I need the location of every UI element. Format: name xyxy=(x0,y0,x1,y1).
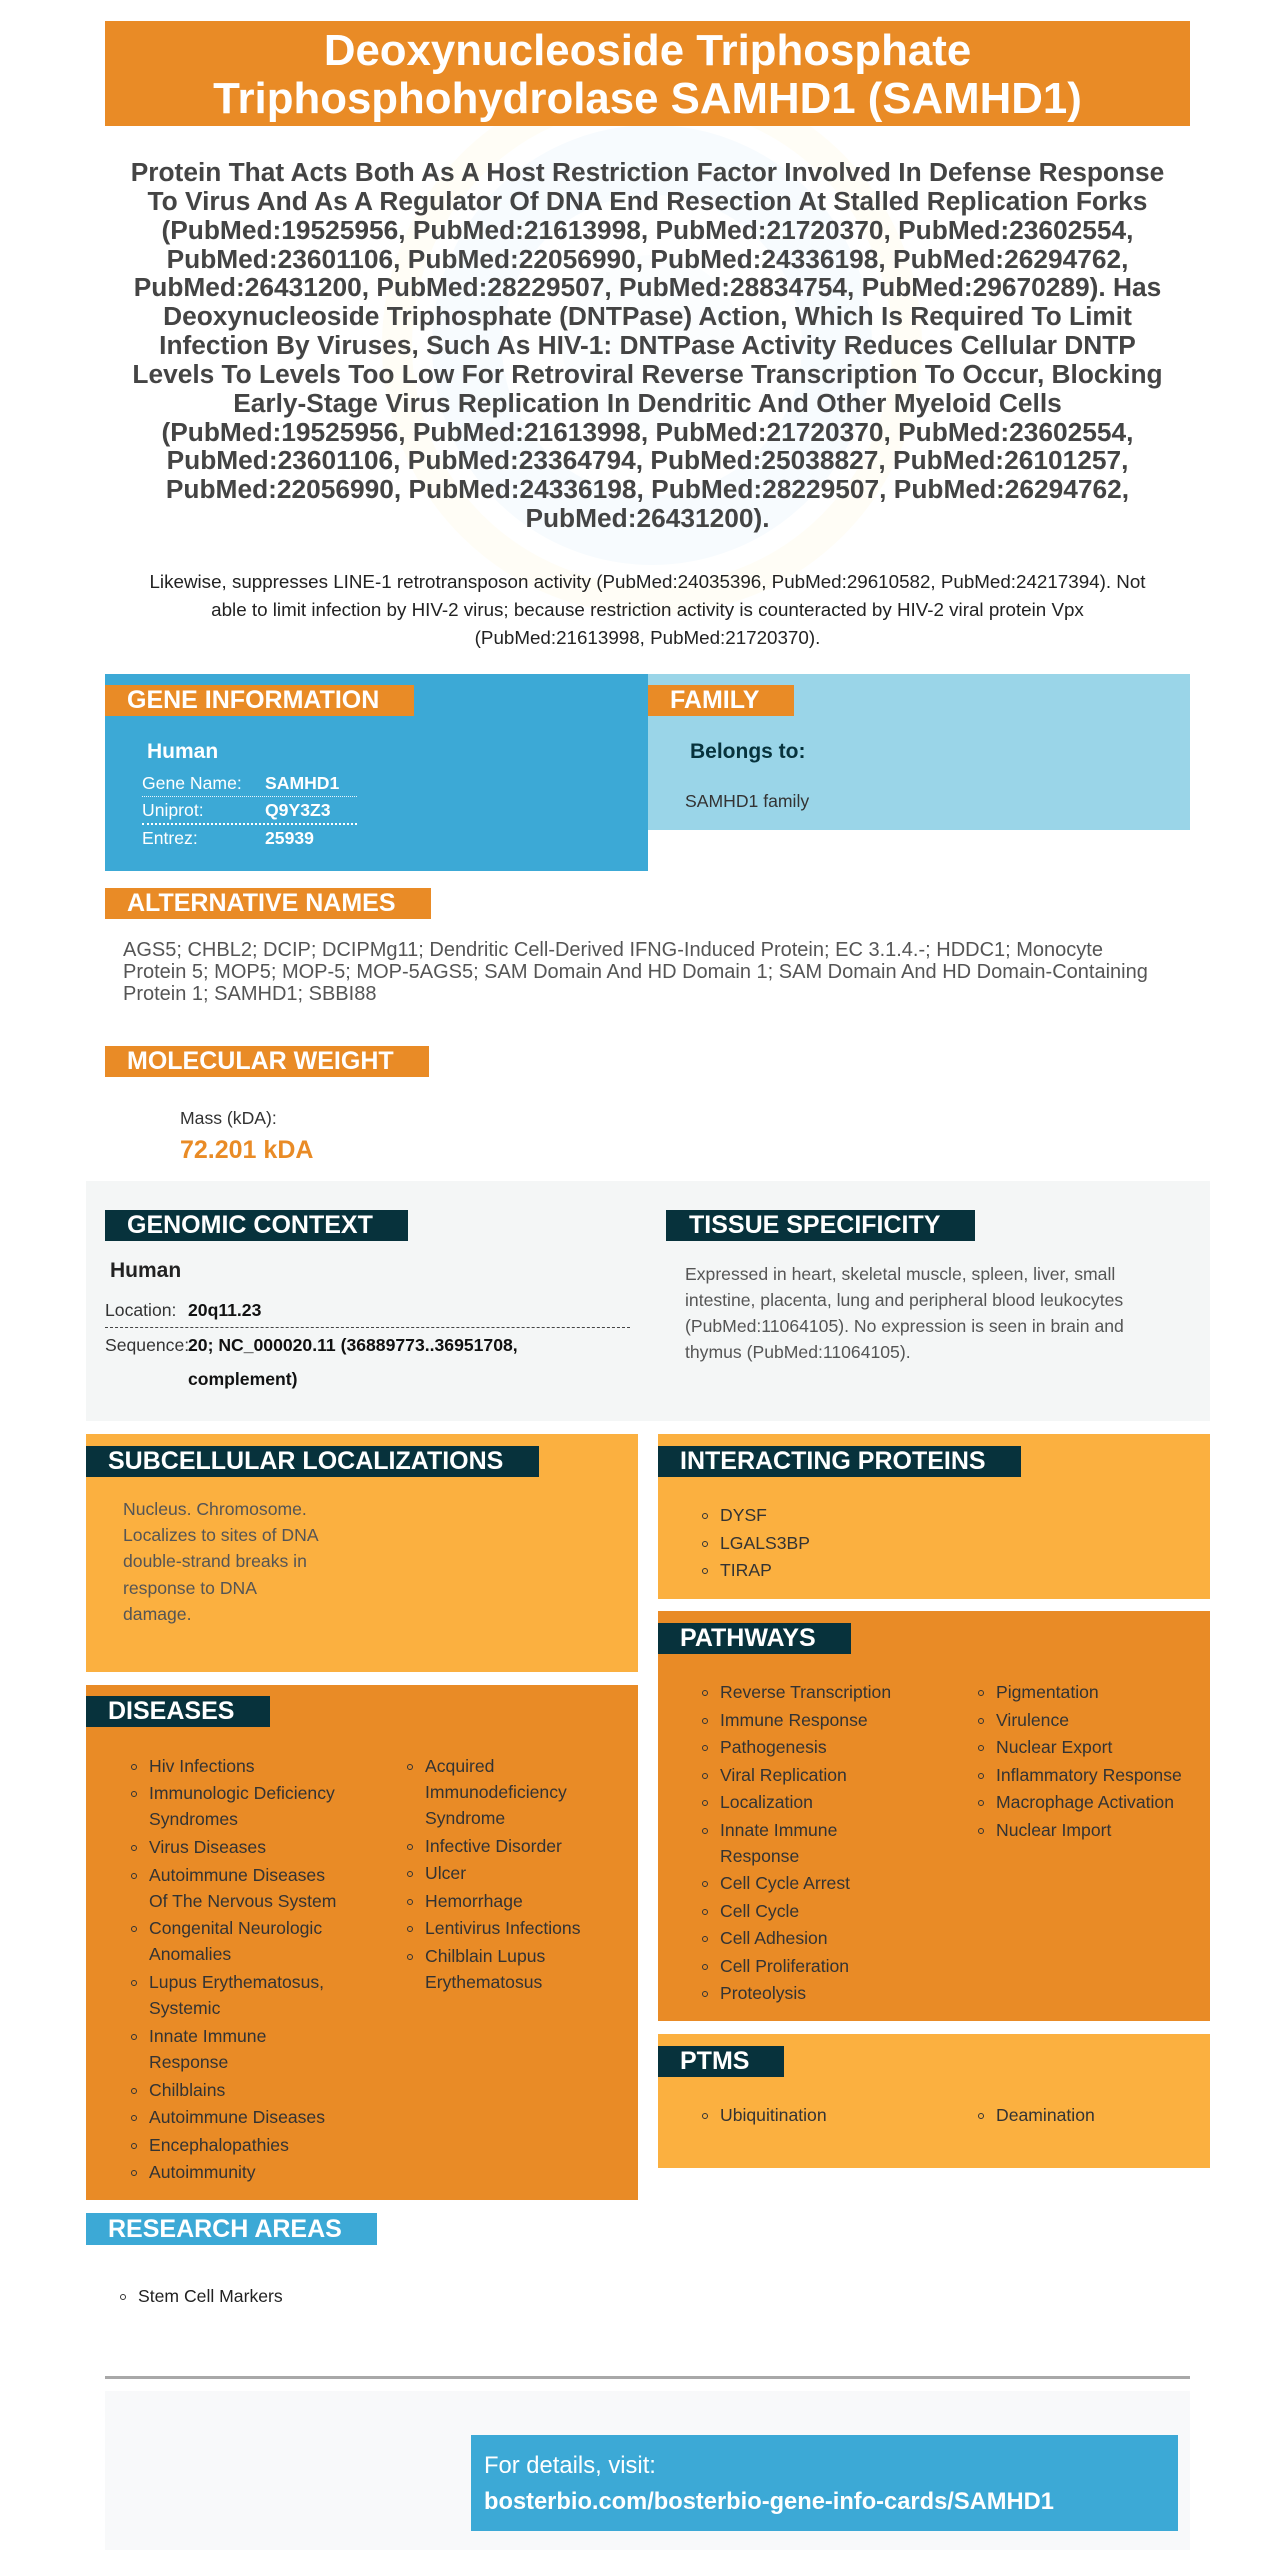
summary paragraph: (PubMed:21613998, PubMed:21720370). xyxy=(475,627,820,648)
pathway list column 2: Inflammatory Response xyxy=(996,1765,1182,1785)
localization text: response to DNA xyxy=(123,1578,257,1598)
sequence row: 20; NC_000020.11 (36889773..36951708, xyxy=(188,1335,518,1355)
heading: subcellular localizations: SUBCELLULAR LOCALIZATIONS xyxy=(108,1447,503,1475)
tissue specificity text: thymus (PubMed:11064105). xyxy=(685,1342,911,1362)
tissue specificity text xyxy=(685,1264,1124,1362)
panel: interacting proteins xyxy=(658,1434,1210,1599)
disease list column 2: Immunodeficiency xyxy=(425,1782,567,1802)
location row: Location: xyxy=(105,1300,176,1320)
localization text: damage. xyxy=(123,1604,191,1624)
entrez row: 25939 xyxy=(265,828,314,848)
panel: family xyxy=(648,674,1190,830)
species label: Human xyxy=(147,740,218,763)
pathway list column 2 xyxy=(978,1682,1182,1840)
panel: gene information xyxy=(105,674,648,871)
summary heading text: Protein That Acts Both As A Host Restriction Factor Involved In Defense Response xyxy=(131,157,1164,187)
pathway list column 1: Localization xyxy=(720,1792,813,1812)
summary heading text: Levels To Levels Too Low For Retroviral Reverse Transcription To Occur, Blocking xyxy=(132,359,1163,389)
summary heading text: Early-Stage Virus Replication In Dendritic And Other Myeloid Cells xyxy=(233,388,1062,418)
research area item: Stem Cell Markers xyxy=(138,2286,283,2306)
heading: gene information: GENE INFORMATION xyxy=(127,686,379,714)
disease list column 1: Autoimmune Diseases xyxy=(149,2107,325,2127)
disease list column 2: Lentivirus Infections xyxy=(425,1918,580,1938)
species label: Human xyxy=(110,1259,181,1282)
ptm item 1: Ubiquitination xyxy=(720,2105,827,2125)
tissue specificity text: Expressed in heart, skeletal muscle, spleen, liver, small xyxy=(685,1264,1115,1284)
belongs to label: Belongs to: xyxy=(690,740,806,763)
disease list column 2 xyxy=(407,1756,580,1992)
heading: research areas: RESEARCH AREAS xyxy=(108,2215,342,2243)
localization text: Localizes to sites of DNA xyxy=(123,1525,319,1545)
disease list column 1: Virus Diseases xyxy=(149,1837,266,1857)
disease list column 2: Hemorrhage xyxy=(425,1891,523,1911)
sequence row xyxy=(105,1335,518,1389)
gene name row xyxy=(142,773,357,797)
heading: diseases xyxy=(86,1696,270,1727)
disease list column 1: Immunologic Deficiency xyxy=(149,1783,335,1803)
pathway list column 1: Cell Cycle Arrest xyxy=(720,1873,850,1893)
sequence row: Sequence: xyxy=(105,1335,189,1355)
gene name row: Gene Name: xyxy=(142,773,242,793)
heading: alternative names: ALTERNATIVE NAMES xyxy=(127,889,396,917)
summary heading text: (PubMed:19525956, PubMed:21613998, PubMed:21720370, PubMed:23602554, xyxy=(162,417,1133,447)
pathway list column 1: Immune Response xyxy=(720,1710,868,1730)
disease list column 2: Ulcer xyxy=(425,1863,466,1883)
entrez row xyxy=(142,828,314,848)
heading: family xyxy=(648,685,794,716)
uniprot row: Uniprot: xyxy=(142,800,204,820)
title: Triphosphohydrolase SAMHD1 (SAMHD1) xyxy=(213,74,1082,123)
mass label: Mass (kDA): xyxy=(180,1108,277,1128)
localization text: Nucleus. Chromosome. xyxy=(123,1499,307,1519)
tissue specificity text: intestine, placenta, lung and peripheral blood leukocytes xyxy=(685,1290,1123,1310)
summary paragraph xyxy=(149,571,1146,648)
disease list column 1: Anomalies xyxy=(149,1944,231,1964)
disease list column 2: Infective Disorder xyxy=(425,1836,562,1856)
pathway list column 2: Nuclear Import xyxy=(996,1820,1111,1840)
disease list column 1: Lupus Erythematosus, xyxy=(149,1972,324,1992)
summary heading text: PubMed:23601106, PubMed:22056990, PubMed:24336198, PubMed:26294762, xyxy=(167,244,1128,274)
disease list column 1: Innate Immune xyxy=(149,2026,266,2046)
summary heading text: PubMed:26431200). xyxy=(525,503,770,533)
heading: interacting proteins: INTERACTING PROTEINS xyxy=(680,1447,986,1475)
family value: SAMHD1 family xyxy=(685,791,809,811)
pathway list column 1: Innate Immune xyxy=(720,1820,837,1840)
pathway list column 1: Viral Replication xyxy=(720,1765,847,1785)
panel: footer xyxy=(105,2391,1190,2550)
summary heading text: Deoxynucleoside Triphosphate (DNTPase) Action, Which Is Required To Limit xyxy=(163,301,1132,331)
heading: tissue specificity: TISSUE SPECIFICITY xyxy=(689,1211,940,1239)
gene name row: SAMHD1 xyxy=(265,773,339,793)
disease list column 1: Syndromes xyxy=(149,1809,238,1829)
title: Deoxynucleoside Triphosphate xyxy=(324,26,971,75)
heading: genomic context: GENOMIC CONTEXT xyxy=(127,1211,373,1239)
disease list column 1: Congenital Neurologic xyxy=(149,1918,322,1938)
uniprot row: Q9Y3Z3 xyxy=(265,800,331,820)
localization text: double-strand breaks in xyxy=(123,1551,307,1571)
summary heading text: (PubMed:19525956, PubMed:21613998, PubMed:21720370, PubMed:23602554, xyxy=(162,215,1133,245)
pathway list column 1 xyxy=(702,1682,891,2003)
alternative names text xyxy=(123,939,1148,1005)
panel: genomic context and tissue specificity xyxy=(86,1181,1210,1421)
disease list column 1 xyxy=(131,1756,336,2182)
panel: ptms xyxy=(658,2034,1210,2168)
heading: diseases: DISEASES xyxy=(108,1697,234,1725)
pathway list column 1: Proteolysis xyxy=(720,1983,806,2003)
disease list column 1: Autoimmune Diseases xyxy=(149,1865,325,1885)
divider rule xyxy=(105,2376,1190,2379)
disease list column 2: Erythematosus xyxy=(425,1972,542,1992)
summary heading text: PubMed:26431200, PubMed:28229507, PubMed:28834754, PubMed:29670289). Has xyxy=(134,272,1161,302)
location row xyxy=(105,1300,630,1328)
disease list column 1: Response xyxy=(149,2052,228,2072)
summary heading text xyxy=(131,157,1164,533)
pathway list column 2: Virulence xyxy=(996,1710,1069,1730)
disease list column 1: Encephalopathies xyxy=(149,2135,289,2155)
disease list column 2: Syndrome xyxy=(425,1808,505,1828)
ptm item 2: Deamination xyxy=(996,2105,1095,2125)
disease list column 1: Of The Nervous System xyxy=(149,1891,336,1911)
disease list column 1: Autoimmunity xyxy=(149,2162,256,2182)
alternative names text: Protein 5; MOP5; MOP-5; MOP-5AGS5; SAM Domain And HD Domain 1; SAM Domain And HD Domain-Containing xyxy=(123,961,1148,983)
pathway list column 1: Reverse Transcription xyxy=(720,1682,891,1702)
pathway list column 1: Pathogenesis xyxy=(720,1737,827,1757)
disease list column 2: Acquired xyxy=(425,1756,494,1776)
summary paragraph: able to limit infection by HIV-2 virus; because restriction activity is counteracted by HIV-2 viral protein Vpx xyxy=(211,599,1084,620)
pathway list column 1: Response xyxy=(720,1846,799,1866)
callout url: bosterbio.com/bosterbio-gene-info-cards/SAMHD1 xyxy=(484,2489,1054,2515)
heading: pathways: PATHWAYS xyxy=(680,1624,816,1652)
pathway list column 1: Cell Proliferation xyxy=(720,1956,849,1976)
alternative names text: AGS5; CHBL2; DCIP; DCIPMg11; Dendritic Cell-Derived IFNG-Induced Protein; EC 3.1.4.-; HDDC1; Monocyte xyxy=(123,939,1103,961)
localization text xyxy=(123,1499,319,1624)
protein list: TIRAP xyxy=(720,1560,772,1580)
uniprot row xyxy=(142,800,357,825)
heading: pathways xyxy=(658,1623,851,1654)
disease list column 2: Chilblain Lupus xyxy=(425,1946,545,1966)
pathway list column 1: Cell Cycle xyxy=(720,1901,799,1921)
panel: diseases xyxy=(86,1685,638,2200)
summary paragraph: Likewise, suppresses LINE-1 retrotransposon activity (PubMed:24035396, PubMed:29610582, PubMed:24217394). Not xyxy=(149,571,1146,592)
sequence row: complement) xyxy=(188,1369,298,1389)
background watermark xyxy=(382,126,922,615)
tissue specificity text: (PubMed:11064105). No expression is seen in brain and xyxy=(685,1316,1124,1336)
disease list column 1: Systemic xyxy=(149,1998,220,2018)
pathway list column 2: Nuclear Export xyxy=(996,1737,1112,1757)
panel: pathways xyxy=(658,1611,1210,2021)
callout label: For details, visit: xyxy=(484,2452,656,2479)
summary heading text: Infection By Viruses, Such As HIV-1: DNTPase Activity Reduces Cellular DNTP xyxy=(159,330,1136,360)
protein list xyxy=(702,1505,810,1580)
panel: subcellular localizations xyxy=(86,1434,638,1672)
protein list: LGALS3BP xyxy=(720,1533,810,1553)
disease list column 1: Hiv Infections xyxy=(149,1756,255,1776)
title xyxy=(105,21,1190,126)
alternative names text: Protein 1; SAMHD1; SBBI88 xyxy=(123,983,376,1005)
summary heading text: PubMed:23601106, PubMed:23364794, PubMed:25038827, PubMed:26101257, xyxy=(167,445,1128,475)
heading: molecular weight: MOLECULAR WEIGHT xyxy=(127,1047,394,1075)
callout: details link xyxy=(471,2435,1178,2531)
pathway list column 1: Cell Adhesion xyxy=(720,1928,828,1948)
location row: 20q11.23 xyxy=(188,1300,261,1320)
entrez row: Entrez: xyxy=(142,828,198,848)
heading: ptms: PTMS xyxy=(680,2047,749,2075)
protein list: DYSF xyxy=(720,1505,767,1525)
disease list column 1: Chilblains xyxy=(149,2080,225,2100)
heading: family: FAMILY xyxy=(670,686,759,714)
heading: ptms xyxy=(658,2046,784,2077)
mass value: 72.201 kDA xyxy=(180,1136,313,1164)
summary heading text: To Virus And As A Regulator Of DNA End Resection At Stalled Replication Forks xyxy=(148,186,1147,216)
pathway list column 2: Pigmentation xyxy=(996,1682,1099,1702)
summary heading text: PubMed:22056990, PubMed:24336198, PubMed:28229507, PubMed:26294762, xyxy=(166,474,1129,504)
pathway list column 2: Macrophage Activation xyxy=(996,1792,1174,1812)
